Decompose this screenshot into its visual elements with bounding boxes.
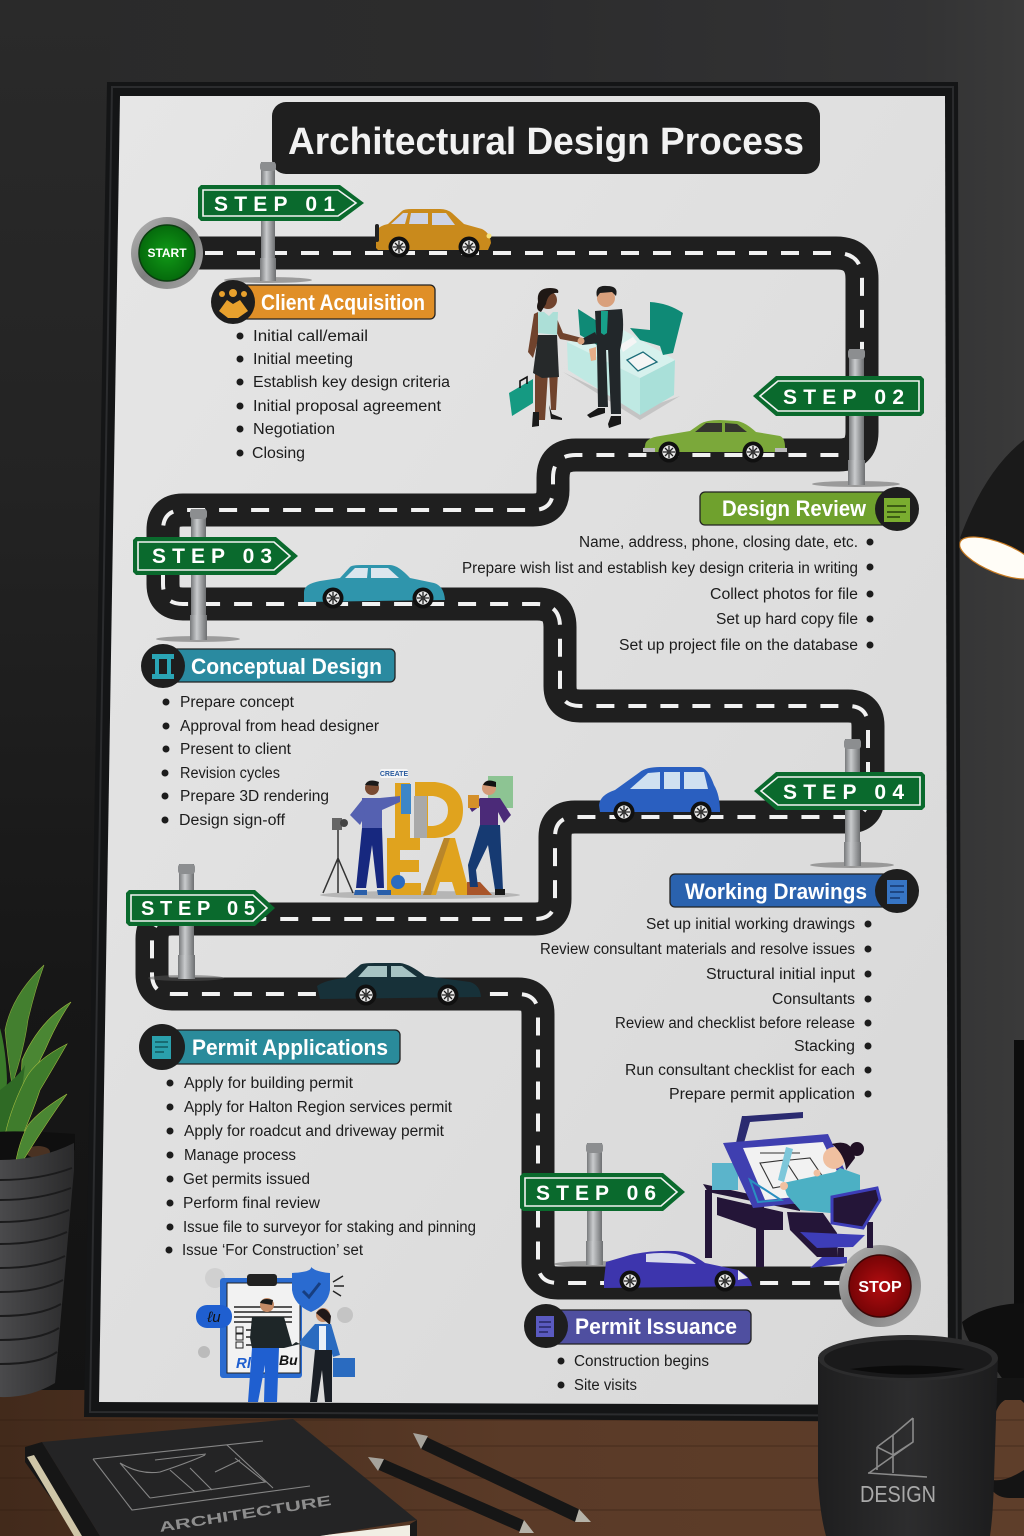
heading: permit issuance: Permit Issuance [575, 1314, 737, 1339]
potted plant [0, 965, 75, 1397]
illustration: drafting table [703, 1112, 880, 1268]
list: working drawings: Structural initial input [706, 966, 856, 983]
heading: permit issuance [524, 1304, 751, 1348]
step 01 signpost: STEP 01 [214, 193, 335, 216]
list: client acquisition: Negotiation [253, 421, 335, 438]
step 04 signpost [754, 739, 925, 868]
step 04 signpost: STEP 04 [783, 781, 904, 804]
list: conceptual design: Design sign-off [179, 812, 286, 829]
illustration: idea team [320, 769, 520, 899]
list: conceptual design: Approval from head designer [180, 718, 379, 735]
car: purple sports car [604, 1251, 752, 1292]
road [152, 253, 880, 1283]
list: design review [462, 534, 874, 654]
list: permit applications: Manage process [184, 1147, 296, 1164]
step 03 signpost [133, 509, 298, 642]
list: permit issuance: Site visits [574, 1377, 637, 1394]
list: working drawings: Consultants [772, 991, 855, 1008]
step 05 signpost: STEP 05 [141, 898, 255, 920]
notebook: ARCHITECTURE [158, 1492, 332, 1535]
start button [131, 217, 203, 289]
title: Architectural Design Process [288, 121, 804, 163]
heading: permit applications: Permit Applications [192, 1035, 388, 1060]
list: working drawings: Review consultant materials and resolve issues [540, 941, 855, 958]
step 03 signpost: STEP 03 [152, 545, 272, 568]
coffee mug: DESIGN [860, 1481, 936, 1507]
list: conceptual design [162, 694, 379, 829]
car: blue hatchback [599, 767, 720, 822]
car: green sedan [643, 420, 787, 462]
stop button [839, 1245, 921, 1327]
list: working drawings: Review and checklist before release [615, 1015, 855, 1032]
list: client acquisition: Establish key design criteria [253, 374, 450, 391]
list: client acquisition: Closing [252, 445, 305, 462]
heading: conceptual design: Conceptual Design [191, 654, 382, 679]
car: teal sedan [304, 565, 445, 608]
poster frame [84, 82, 962, 1422]
list: client acquisition: Initial call/email [253, 328, 368, 345]
stop button: STOP [858, 1279, 902, 1296]
step 01 signpost [198, 162, 364, 283]
illustration: permit signing: Rl [236, 1355, 252, 1372]
step 06 signpost: STEP 06 [536, 1182, 656, 1205]
list: permit applications: Apply for roadcut and driveway permit [184, 1123, 445, 1140]
list: client acquisition: Initial proposal agreement [253, 398, 442, 415]
desk lamp [954, 440, 1024, 1403]
illustration: permit signing: ℓu [206, 1309, 221, 1326]
start button: START [147, 246, 187, 260]
list: permit issuance [558, 1353, 709, 1394]
list: client acquisition: Initial meeting [253, 351, 353, 368]
list: permit issuance: Construction begins [574, 1353, 709, 1370]
car: dark sedan [317, 963, 481, 1006]
illustration: permit signing [196, 1267, 355, 1402]
list: design review: Collect photos for file [710, 586, 858, 603]
poster paper [99, 96, 948, 1405]
coffee mug [818, 1335, 1024, 1536]
list: design review: Set up hard copy file [716, 611, 858, 628]
illustration: permit signing: Bu [279, 1352, 298, 1368]
list: permit applications [166, 1075, 476, 1259]
list: conceptual design: Prepare concept [180, 694, 295, 711]
list: permit applications: Get permits issued [183, 1171, 310, 1188]
heading: client acquisition: Client Acquisition [261, 290, 425, 315]
list: permit applications: Perform final review [183, 1195, 321, 1212]
list: design review: Set up project file on the database [619, 637, 858, 654]
list: permit applications: Issue ‘For Construction’ set [182, 1242, 364, 1259]
wooden desk [0, 1390, 1024, 1536]
list: working drawings: Set up initial working drawings [646, 916, 855, 933]
list: permit applications: Apply for building permit [184, 1075, 354, 1092]
step 05 signpost [126, 864, 275, 981]
illustration: idea team: CREATE [380, 771, 408, 778]
list: conceptual design: Present to client [180, 741, 292, 758]
list: conceptual design: Prepare 3D rendering [180, 788, 329, 805]
list: design review: Prepare wish list and establish key design criteria in writing [462, 560, 858, 577]
heading: working drawings [670, 869, 919, 913]
step 02 signpost: STEP 02 [783, 386, 904, 409]
heading: client acquisition [211, 280, 435, 324]
notebook [25, 1419, 417, 1536]
list: working drawings: Prepare permit application [669, 1086, 855, 1103]
heading: design review [700, 487, 919, 531]
list: client acquisition [236, 328, 450, 462]
pens [368, 1433, 591, 1533]
list: working drawings: Stacking [794, 1038, 855, 1055]
title [272, 102, 820, 174]
car: orange hatchback [375, 209, 492, 258]
heading: design review: Design Review [722, 496, 867, 521]
list: permit applications: Apply for Halton Region services permit [184, 1099, 453, 1116]
heading: permit applications [139, 1024, 400, 1070]
list: design review: Name, address, phone, closing date, etc. [579, 534, 858, 551]
list: working drawings: Run consultant checklist for each [625, 1062, 855, 1079]
heading: conceptual design [141, 644, 395, 688]
step 02 signpost [753, 349, 924, 487]
list: permit applications: Issue file to surveyor for staking and pinning [183, 1219, 476, 1236]
illustration: client handshake at desk [509, 286, 683, 428]
list: conceptual design: Revision cycles [180, 765, 280, 782]
list: working drawings [540, 916, 872, 1103]
step 06 signpost [520, 1143, 685, 1267]
heading: working drawings: Working Drawings [685, 879, 867, 904]
